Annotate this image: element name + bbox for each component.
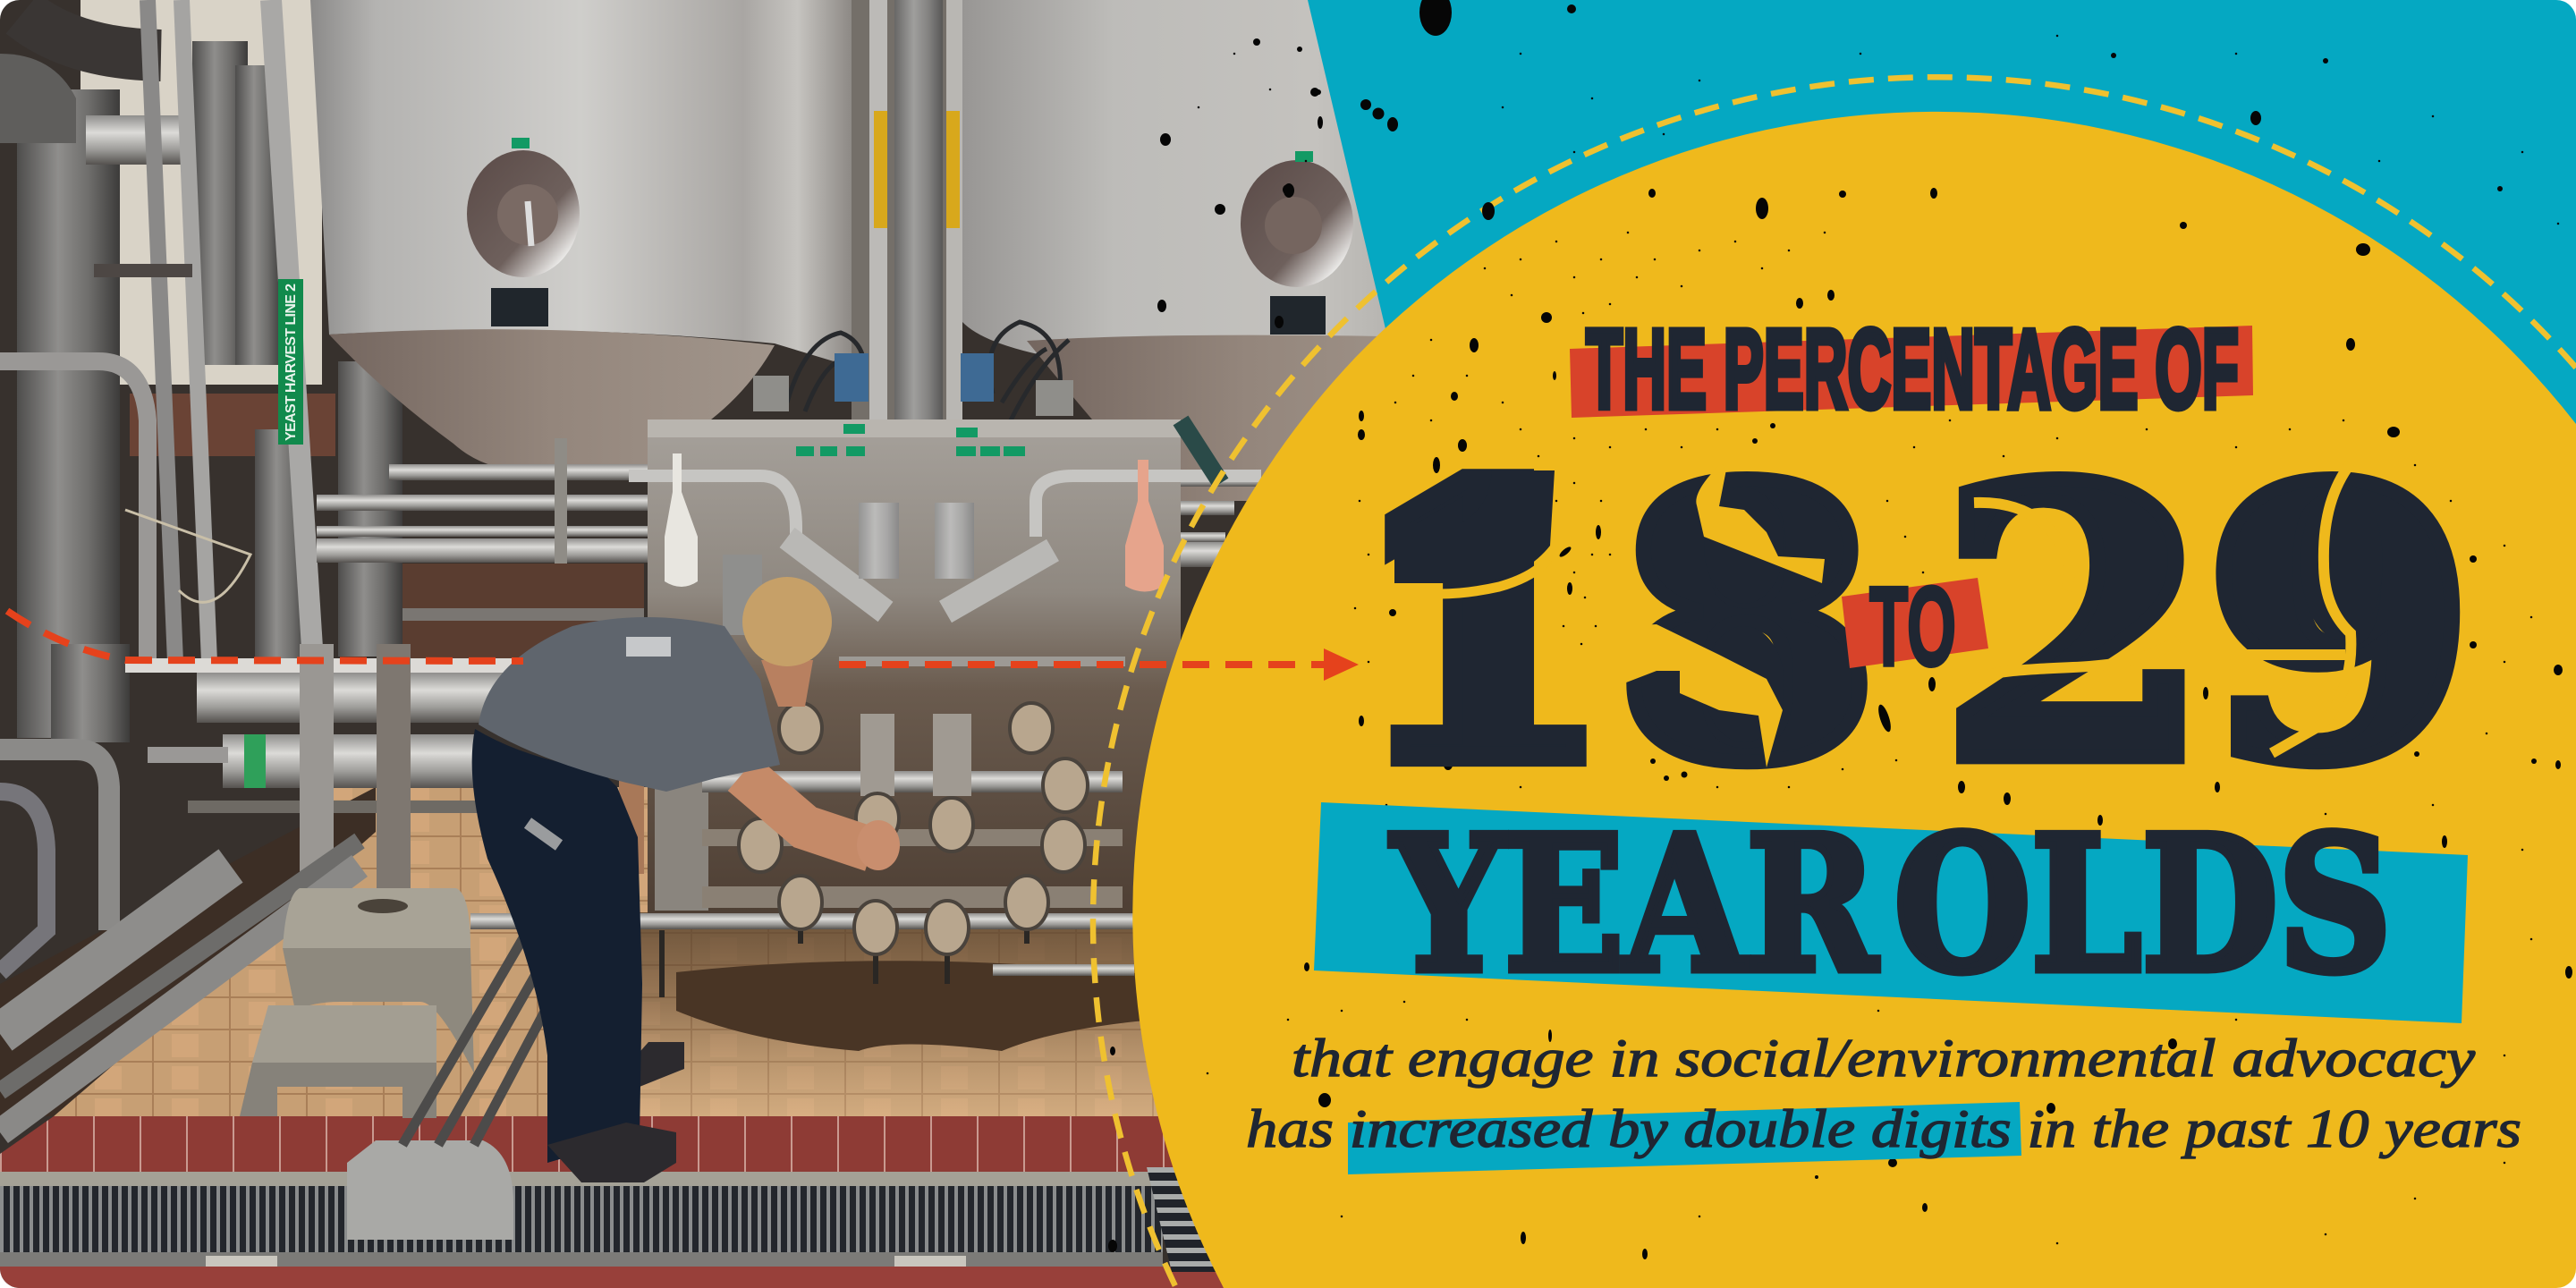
centre pipes between tanks: [852, 0, 962, 429]
word: to: [1842, 564, 1988, 690]
technician: [472, 577, 900, 1182]
big number: 18: [1348, 405, 1880, 845]
year olds text: YEAR OLDS: [1390, 796, 2392, 1014]
mid-left cylinders and poles: [51, 644, 519, 890]
shirt print: [626, 637, 671, 657]
red highlight: [1842, 578, 1988, 668]
arm: [742, 774, 872, 850]
spray bottles: [665, 453, 1164, 592]
tank: right: [962, 0, 1467, 501]
highlight behind body text: [1348, 1102, 2021, 1174]
left vertical pipes: [0, 0, 313, 738]
pipe manifold with gauges: [470, 657, 1134, 997]
heading: the percentage of: [1570, 306, 2253, 432]
concrete block: [347, 1140, 513, 1240]
front boot: [547, 1123, 676, 1182]
red dashed arrow: [7, 611, 1359, 681]
big number: 29: 2: [1937, 406, 2212, 845]
lower left curved pipes: [0, 750, 360, 1132]
tank: left: [310, 0, 852, 657]
rear boot: [629, 1042, 684, 1087]
yellow circle: [1132, 112, 2576, 1288]
teal highlight bar: [1314, 802, 2468, 1023]
conduit pipes: [402, 930, 555, 1145]
trousers: [472, 729, 642, 1163]
tool in pocket: [528, 823, 559, 845]
floor drain grate: [0, 1167, 1225, 1288]
arrow head: [1324, 648, 1359, 681]
body text: that engage in social/environmental advocacy: [1292, 1029, 2475, 1088]
heading: year olds: [1314, 796, 2468, 1023]
photo: brewery fermentation tanks and technician: [0, 0, 1467, 1288]
hand: [857, 820, 900, 870]
rear arm: [619, 778, 644, 874]
teal background shape: [1308, 0, 2576, 537]
stencil cuts: [1968, 463, 2351, 753]
big number: 29: [1937, 406, 2477, 845]
red highlight bar: [1570, 326, 2253, 418]
body text: [1246, 1029, 2521, 1158]
pipe label: yeast harvest line: [278, 279, 303, 445]
arrow line: [7, 611, 1324, 665]
dashed yellow arc: [1093, 77, 2576, 1288]
filled counter of the 9: [2301, 483, 2383, 640]
horizontal pipes left of panel: [317, 438, 1261, 662]
step stool: [240, 888, 474, 1118]
floor: red tile band: [0, 1116, 1181, 1172]
stencil cuts: [1440, 463, 1825, 767]
body text: has increased by double digits in the past 10 years: [1246, 1099, 2521, 1158]
big number: 29: 9: [2202, 406, 2477, 845]
pipe label: yeast harvest line: YEAST HARVEST LINE 2: [284, 284, 299, 441]
big number: 18: 1: [1348, 405, 1614, 845]
to text: TO: [1869, 564, 1956, 690]
big number: 18: 8: [1614, 405, 1880, 845]
face: [761, 660, 813, 707]
floor: tan bricks: [0, 787, 1199, 1116]
t-shirt: [479, 617, 780, 792]
ink splatter: [1108, 0, 2572, 1259]
sensors and cables: [753, 322, 1073, 420]
hair: [742, 577, 832, 666]
control panel: [629, 419, 1261, 913]
flag of the 1 and filled counters of the 8: [1394, 470, 1784, 742]
wall behind pipes: [80, 0, 322, 385]
